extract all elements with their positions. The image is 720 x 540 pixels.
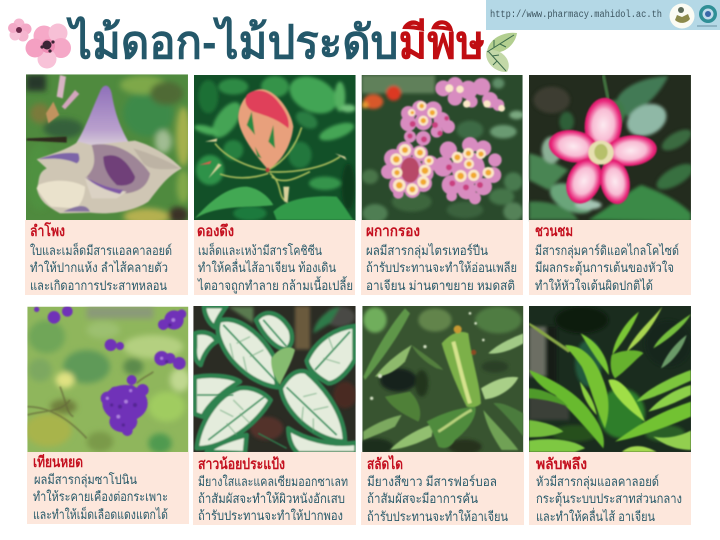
- caption: ผกากรอง: ผลมีสารกลุ่มไตรเทอร์ปีน: [366, 243, 488, 259]
- icon: pharmacy logo: [670, 4, 694, 28]
- caption: ผกากรอง: อาเจียน ม่านตาขยาย หมดสติ: [366, 278, 515, 293]
- panel: ดองดึง: [193, 69, 356, 295]
- caption: สลัดได: มียางสีขาว มีสารฟอร์บอล: [367, 474, 497, 489]
- caption: พลับพลึง: พลับพลึง: [536, 455, 587, 473]
- caption: พลับพลึง: กระตุ้นระบบประสาทส่วนกลาง: [536, 491, 682, 507]
- caption: ชวนชม: [529, 220, 691, 295]
- caption: ชวนชม: ชวนชม: [535, 223, 573, 240]
- caption: เทียนหยด: ทำให้ระคายเคืองต่อกระเพาะ: [33, 489, 168, 504]
- icon: large pink flower: [26, 24, 71, 68]
- caption: สาวน้อยประแป้ง: [193, 452, 356, 525]
- caption: สลัดได: ถ้าสัมผัสจะมีอาการคัน: [367, 491, 478, 506]
- photo: desert rose: [529, 75, 697, 222]
- panel: ชวนชม: [529, 75, 697, 295]
- photo: euphorbia: [357, 306, 523, 455]
- caption: ลำโพง: ลำโพง: [30, 221, 65, 240]
- caption: ดองดึง: เมล็ดและเหง้ามีสารโคชิซีน: [198, 241, 322, 258]
- caption: ผกากรอง: ผกากรอง: [366, 223, 420, 240]
- caption: เทียนหยด: ผลมีสารกลุ่มซาโปนิน: [34, 472, 137, 488]
- photo: lantana: [362, 75, 524, 223]
- panel: สลัดได: [357, 306, 524, 525]
- caption: เทียนหยด: และทำให้เม็ดเลือดแดงแตกได้: [33, 505, 168, 522]
- caption: พลับพลึง: และทำให้คลื่นไส้ อาเจียน: [536, 508, 655, 524]
- caption: สาวน้อยประแป้ง: ถ้ารับประทานจะทำให้ปากพอง: [198, 508, 343, 523]
- photo: golden dewdrop: [25, 306, 190, 453]
- panel: พลับพลึง: [528, 306, 692, 525]
- caption: ดองดึง: ทำให้คลื่นไส้อาเจียน ท้องเดิน: [198, 259, 336, 275]
- caption: สลัดได: [361, 452, 524, 525]
- icon: small pink flower: [8, 18, 32, 42]
- photo: crinum lily: [528, 306, 692, 452]
- caption: ดองดึง: [194, 220, 355, 295]
- photo: angel's trumpet flower: [26, 74, 191, 225]
- photo: dumb cane: [193, 306, 357, 453]
- caption: พลับพลึง: [529, 452, 691, 525]
- caption: ดองดึง: ดองดึง: [197, 222, 234, 240]
- photo: glory lily: [193, 69, 356, 221]
- icon: faculty logo: [697, 5, 717, 27]
- caption: ลำโพง: [25, 220, 188, 295]
- caption: ลำโพง: ทำให้ปากแห้ง ลำไส้คลายตัว: [30, 260, 168, 275]
- website banner: [486, 0, 720, 30]
- caption: สลัดได: ถ้ารับประทานจะทำให้อาเจียน: [367, 509, 508, 524]
- caption: ลำโพง: ใบและเมล็ดมีสารแอลคาลอยด์: [30, 241, 172, 258]
- caption: พลับพลึง: หัวมีสารกลุ่มแอลคาลอยด์: [536, 474, 659, 490]
- panel: ผกากรอง: [361, 75, 524, 295]
- caption: สาวน้อยประแป้ง: ถ้าสัมผัสจะทำให้ผิวหนังอักเสบ: [198, 491, 345, 506]
- caption: เทียนหยด: เทียนหยด: [33, 454, 83, 471]
- website url: http://www.pharmacy.mahidol.ac.th: [490, 9, 662, 21]
- caption: ดองดึง: ไตอาจถูกทำลาย กล้ามเนื้อเปลี้ย: [197, 276, 353, 294]
- caption: ผกากรอง: ถ้ารับประทานจะทำให้อ่อนเพลีย: [366, 260, 517, 275]
- icon: green leaf: [486, 33, 517, 72]
- caption: เทียนหยด: [27, 452, 189, 524]
- caption: สลัดได: สลัดได: [367, 454, 403, 473]
- caption: สาวน้อยประแป้ง: มียางใสและแคลเซียมออกซาเลท: [198, 474, 348, 489]
- panel: เทียนหยด: [25, 306, 190, 524]
- caption: ชวนชม: ทำให้หัวใจเต้นผิดปกติได้: [535, 278, 653, 293]
- panel: สาวน้อยประแป้ง: [193, 306, 357, 525]
- title: ไม้ดอก-ไม้ประดับมีพิษ: [65, 16, 485, 68]
- caption: ผกากรอง: [361, 220, 523, 295]
- panel: ลำโพง: [25, 74, 191, 295]
- caption: ชวนชม: มีสารกลุ่มคาร์ดิแอคไกลโคไซด์: [535, 243, 679, 259]
- caption: ชวนชม: มีผลกระตุ้นการเต้นของหัวใจ: [535, 260, 674, 276]
- caption: ลำโพง: และเกิดอาการประสาทหลอน: [30, 278, 167, 293]
- caption: สาวน้อยประแป้ง: สาวน้อยประแป้ง: [198, 456, 285, 473]
